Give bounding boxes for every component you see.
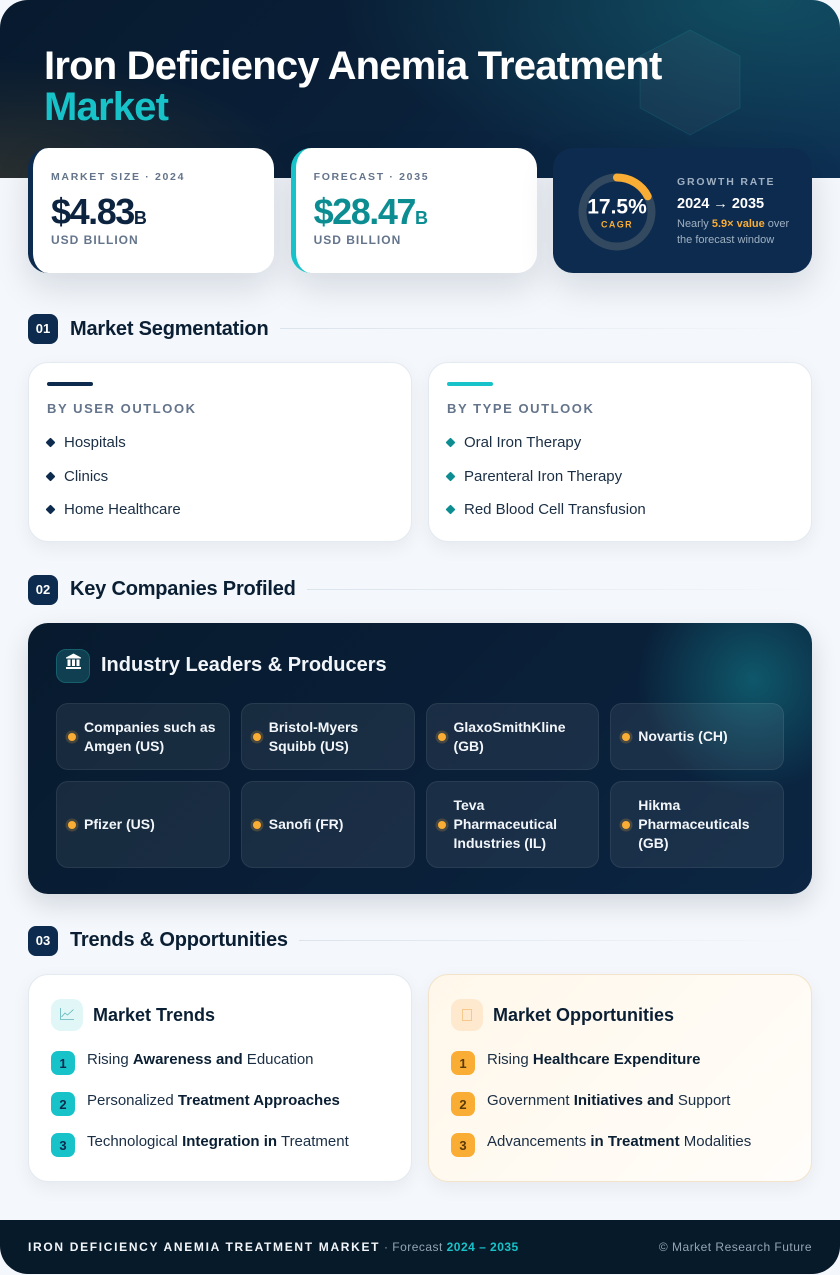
section heading: 02: Key Companies Profiled (70, 578, 296, 600)
section heading: 02: 02 (36, 582, 50, 597)
panel: market opportunities: Government Initiatives and Support (487, 1092, 730, 1109)
company: Hikma Pharmaceuticals (GB) (638, 797, 750, 851)
footer (0, 1220, 840, 1274)
section heading: 02 (28, 575, 648, 605)
company (56, 781, 230, 868)
panel: by user outlook (28, 362, 412, 542)
CAGR donut: 17.5% (587, 196, 647, 218)
heading: Market Trends (93, 1005, 215, 1025)
hexagon decoration (640, 30, 740, 136)
panel: by type outlook: BY TYPE OUTLOOK (447, 401, 594, 416)
stat card: forecast (291, 148, 537, 273)
panel: by type outlook: Red Blood Cell Transfusion (464, 501, 646, 518)
CAGR donut (578, 174, 656, 250)
company (56, 703, 230, 770)
title (44, 44, 662, 129)
section heading: 01: Market Segmentation (70, 318, 268, 340)
stat card: market size: MARKET SIZE · 2024 (51, 171, 185, 183)
section heading: 01 (28, 314, 642, 344)
growth text (677, 176, 789, 246)
panel heading: Industry Leaders & Producers (101, 654, 387, 676)
company: Pfizer (US) (84, 816, 155, 832)
section heading: 03 (28, 926, 644, 956)
item 3: 3 (459, 1138, 467, 1153)
growth text: the forecast window (677, 234, 774, 246)
growth text: 2024 → 2035 (677, 196, 764, 212)
item 3: 3 (59, 1138, 67, 1153)
footer credit: © Market Research Future (659, 1240, 812, 1254)
stat card: market size: USD BILLION (51, 233, 139, 247)
growth text: GROWTH RATE (677, 176, 775, 188)
item 2 (51, 1092, 75, 1116)
panel: by type outlook (428, 362, 812, 542)
stat card: growth rate (553, 148, 812, 273)
panel: by user outlook: Clinics (64, 468, 108, 485)
stat card: forecast: USD BILLION (314, 233, 401, 247)
panel: market opportunities: Rising Healthcare Expenditure (487, 1051, 700, 1068)
company: Teva Pharmaceutical Industries (IL) (454, 797, 557, 851)
panel: by user outlook: Hospitals (64, 434, 126, 451)
icon: missing glyph box (451, 999, 483, 1031)
section heading: 01: 01 (36, 321, 50, 336)
panel: market trends: Technological Integration in Treatment (87, 1133, 349, 1150)
item 2: 2 (459, 1097, 467, 1112)
header banner (0, 0, 840, 178)
panel: by type outlook: Parenteral Iron Therapy (464, 468, 622, 485)
panel: market trends: Personalized Treatment Approaches (87, 1092, 340, 1109)
item 3 (51, 1133, 75, 1157)
company (610, 703, 784, 770)
panel: market opportunities (428, 974, 812, 1182)
panel: by user outlook: BY USER OUTLOOK (47, 401, 197, 416)
item 1: 1 (59, 1056, 67, 1071)
company: Bristol-Myers Squibb (US) (269, 718, 358, 754)
stat card: forecast: $28.47B (314, 191, 428, 232)
item 3 (451, 1133, 475, 1157)
company (241, 703, 414, 770)
panel: market trends (28, 974, 412, 1182)
item 2: 2 (59, 1097, 67, 1112)
CAGR donut: CAGR (601, 220, 633, 230)
icon: chart (51, 999, 83, 1031)
footer title: IRON DEFICIENCY ANEMIA TREATMENT MARKET · Forecast 2024 – 2035 (28, 1240, 519, 1254)
heading: Market Opportunities (493, 1005, 674, 1025)
item 1 (51, 1051, 75, 1075)
panel: by user outlook: Home Healthcare (64, 501, 181, 518)
company (426, 781, 599, 868)
panel: by type outlook: Oral Iron Therapy (464, 434, 581, 451)
section heading: 03: Trends & Opportunities (70, 929, 288, 951)
panel: market opportunities: Advancements in Treatment Modalities (487, 1133, 751, 1150)
panel: industry leaders (28, 623, 812, 894)
item 2 (451, 1092, 475, 1116)
company (610, 781, 784, 868)
company: GlaxoSmithKline (GB) (454, 718, 566, 754)
company (241, 781, 414, 868)
item 1: 1 (459, 1056, 467, 1071)
title: Iron Deficiency Anemia Treatment (44, 44, 662, 88)
company: Sanofi (FR) (269, 816, 343, 832)
company (426, 703, 599, 770)
company: Companies such as Amgen (US) (84, 718, 216, 754)
panel: market trends: Rising Awareness and Education (87, 1051, 314, 1068)
stat card: market size: $4.83B (51, 191, 147, 232)
stat card: forecast: FORECAST · 2035 (314, 171, 429, 183)
section heading: 03: 03 (36, 933, 50, 948)
title: Market (44, 85, 168, 129)
item 1 (451, 1051, 475, 1075)
company: Novartis (CH) (638, 728, 728, 744)
stat card: market size (28, 148, 274, 273)
icon: bank (56, 649, 90, 683)
growth text: Nearly 5.9× value over (677, 218, 789, 230)
